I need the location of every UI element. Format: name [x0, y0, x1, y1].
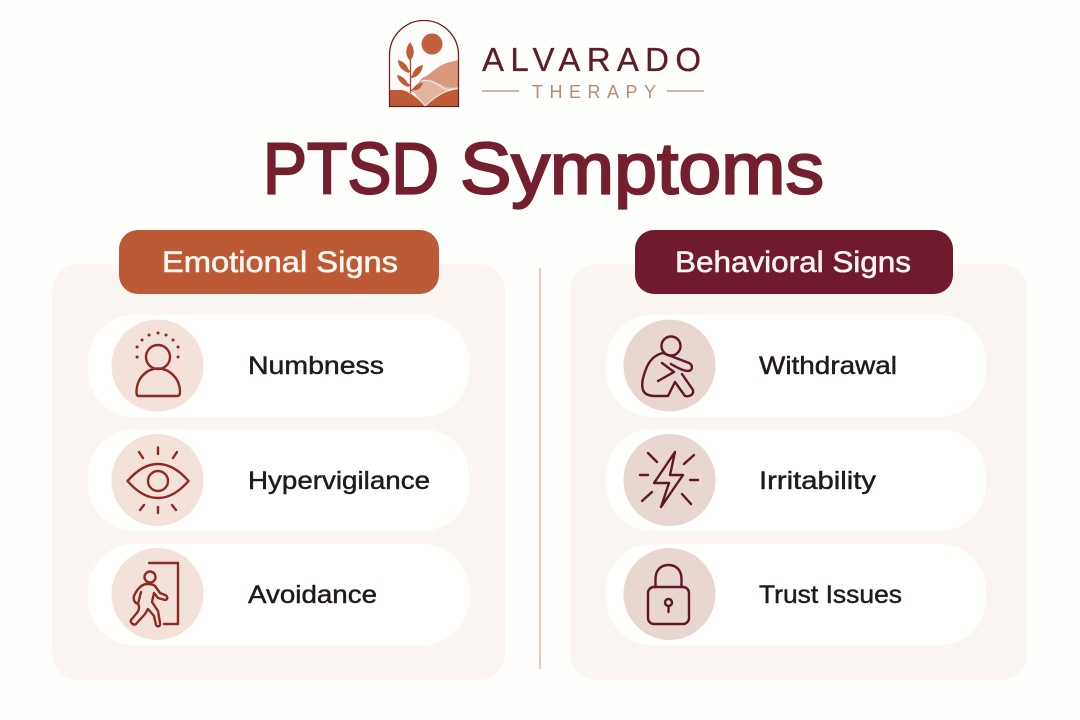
heading: emotional signs: Emotional Signs — [162, 246, 398, 279]
row: irritability — [606, 429, 986, 531]
icon: eye — [128, 448, 188, 513]
logo subtitle: THERAPY — [532, 82, 656, 102]
panel: behavioral signs — [570, 230, 1027, 680]
heading: emotional signs — [119, 230, 439, 294]
row: trust issues: Trust Issues — [759, 581, 902, 609]
divider — [539, 268, 541, 669]
row: trust issues — [606, 544, 986, 645]
row: avoidance — [88, 544, 469, 645]
logo emblem — [390, 20, 458, 106]
row: withdrawal: Withdrawal — [759, 352, 897, 380]
logo wordmark: ALVARADO — [482, 41, 704, 78]
logo: Alvarado Therapy — [390, 20, 704, 106]
panel: emotional signs — [52, 230, 505, 680]
row: withdrawal — [606, 315, 986, 417]
icon: lightning bolt with sparks — [640, 452, 698, 507]
icon: seated person hugging knees — [642, 336, 693, 396]
title: PTSD — [263, 130, 439, 210]
row: hypervigilance: Hypervigilance — [248, 467, 430, 495]
panel background — [52, 264, 505, 680]
heading: behavioral signs — [635, 230, 953, 294]
row: numbness: Numbness — [248, 352, 384, 380]
title — [263, 130, 824, 210]
icon: person leaving through door — [131, 563, 178, 626]
icon: padlock — [648, 565, 689, 624]
row: hypervigilance — [88, 429, 469, 531]
icon: person with dots — [136, 333, 180, 396]
row: numbness — [88, 315, 469, 417]
row: irritability: Irritability — [759, 467, 877, 495]
title: Symptoms — [460, 130, 824, 210]
panel background — [570, 264, 1027, 680]
heading: behavioral signs: Behavioral Signs — [675, 246, 911, 279]
row: avoidance: Avoidance — [248, 581, 377, 609]
